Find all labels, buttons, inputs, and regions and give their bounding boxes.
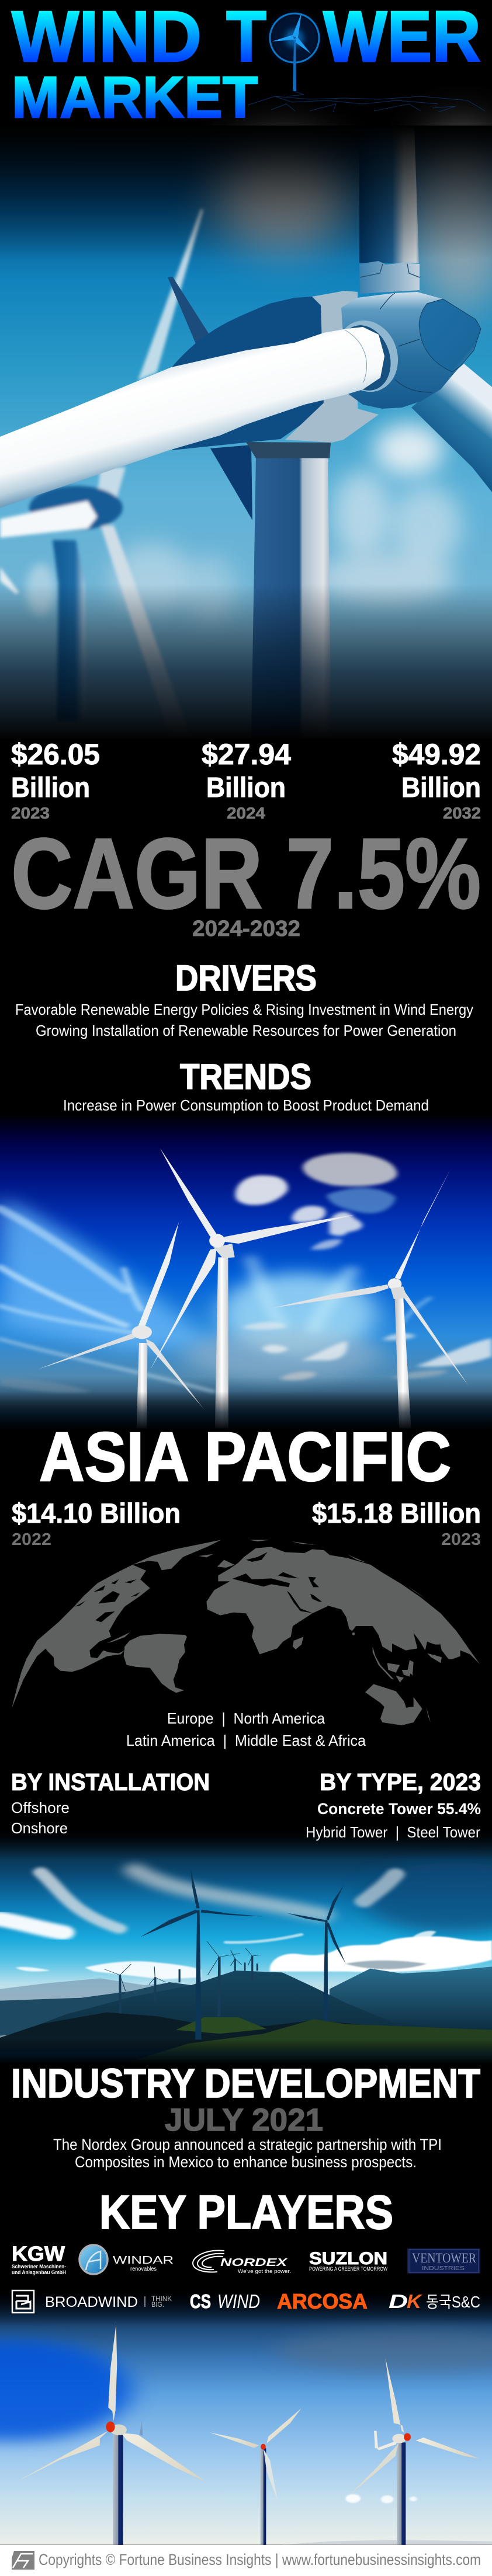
by installation segment: Onshore xyxy=(11,1819,68,1837)
South America xyxy=(124,1634,187,1693)
small tail fin blade xyxy=(168,277,209,345)
logo: Windar xyxy=(79,2245,174,2274)
cumulus clouds xyxy=(16,1931,492,1979)
market size 2032: Billion xyxy=(401,772,481,803)
logo: Nordex xyxy=(193,2251,291,2274)
by type segment: BY TYPE, 2023 xyxy=(320,1769,481,1795)
market size 2023: $26.05 xyxy=(11,738,100,771)
turbine: left xyxy=(39,1222,205,1429)
market size 2023 xyxy=(11,738,100,822)
logo: Suzlon: POWERING A GREENER TOMORROW xyxy=(309,2266,387,2272)
near dark hills xyxy=(0,2013,492,2063)
top fade xyxy=(0,1826,492,1860)
by installation segment: Offshore xyxy=(11,1799,70,1816)
distant hills xyxy=(282,2540,492,2545)
Iceland xyxy=(199,1554,213,1557)
seas cut out of Eurasia xyxy=(233,1552,322,1613)
Greenland xyxy=(133,1540,221,1570)
market size 2023: Billion xyxy=(11,772,90,803)
cloud puffs xyxy=(0,1153,492,1393)
logo: DK Dongkuk S&C: K xyxy=(407,2290,422,2312)
footer band xyxy=(0,2545,492,2576)
by type segment: Hybrid Tower | Steel Tower xyxy=(306,1823,480,1841)
logo: Broadwind: BROADWIND xyxy=(45,2294,138,2310)
other regions: Europe | North America xyxy=(167,1710,325,1727)
logo: KGW: Schweriner Maschinen- xyxy=(12,2264,66,2269)
low-poly network ground under the icon xyxy=(248,90,485,112)
by type segment xyxy=(306,1769,481,1841)
market size 2024 xyxy=(202,738,291,822)
title line: MARKET: MARKET xyxy=(12,65,258,130)
logo: Ventower Industries xyxy=(407,2248,480,2274)
North America xyxy=(12,1565,150,1708)
blade collar ring xyxy=(327,312,407,400)
market size 2032: $49.92 xyxy=(392,738,481,771)
bottom image: three turbines on a pale sky xyxy=(0,2289,492,2545)
Madagascar xyxy=(293,1637,303,1649)
trend text: Increase in Power Consumption to Boost Product Demand xyxy=(63,1096,429,1114)
small background turbines xyxy=(104,1941,261,2016)
dusky upper right xyxy=(276,2330,492,2372)
image: three white turbines on a deep blue sky xyxy=(0,1113,492,1430)
by installation segment: BY INSTALLATION xyxy=(11,1769,210,1795)
lower right blade xyxy=(411,364,492,492)
dark upper right sky xyxy=(361,1863,492,1933)
logo: CS Wind xyxy=(190,2290,260,2312)
far white blade xyxy=(138,208,203,381)
logo: Ventower Industries: INDUSTRIES xyxy=(422,2265,465,2272)
green knoll xyxy=(176,2017,266,2034)
Eurasia and Africa xyxy=(206,1540,480,1725)
bottom fade xyxy=(0,1391,492,1430)
other regions: Latin America | Middle East & Africa xyxy=(126,1732,366,1749)
small clouds xyxy=(345,2494,417,2503)
saturated blue on the left xyxy=(0,2340,132,2441)
broad luminous cirrus on the left xyxy=(0,1197,213,1350)
market size 2024: 2024 xyxy=(227,804,265,822)
icon: Fortune Business Insights mark xyxy=(12,2551,34,2570)
hub seams xyxy=(380,293,432,392)
development text: Composites in Mexico to enhance business prospects. xyxy=(75,2153,417,2171)
logo: Windar: WINDAR xyxy=(113,2254,174,2266)
turbine: right xyxy=(273,1169,468,1429)
bottom fade xyxy=(0,584,492,742)
triangular fin xyxy=(210,445,252,520)
market size 2032 xyxy=(392,738,481,822)
logo: DK Dongkuk S&C xyxy=(389,2290,480,2312)
logo: Broadwind: BIG. xyxy=(151,2300,164,2309)
region value 2023: 2023 xyxy=(441,1530,481,1549)
other regions xyxy=(126,1710,366,1749)
logo: DK Dongkuk S&C: 동국S&C xyxy=(426,2293,480,2311)
right mountain range xyxy=(330,1966,492,2032)
logo: Nordex: We've got the power. xyxy=(238,2268,291,2274)
logo: Windar: renovables xyxy=(130,2266,157,2272)
nacelle xyxy=(171,291,379,450)
spinner hub xyxy=(341,292,481,409)
CAGR period: 2024-2032 xyxy=(192,917,300,941)
main foreground turbine xyxy=(140,1868,263,2039)
logo: Broadwind: THINK xyxy=(151,2295,172,2303)
streak clouds xyxy=(0,1870,396,1943)
market size 2024: Billion xyxy=(206,772,286,803)
turbine: centre xyxy=(150,1148,354,1429)
development date: JULY 2021 xyxy=(165,2102,323,2138)
turbine: right xyxy=(349,2358,480,2545)
hazy far mountains xyxy=(0,1978,195,2001)
region value 2022: $14.10 Billion xyxy=(12,1498,181,1529)
logo: KGW: KGW xyxy=(12,2243,65,2265)
market size 2032: 2032 xyxy=(443,804,481,822)
world map globe xyxy=(12,1540,480,1725)
logo: KGW: und Anlagenbau GmbH xyxy=(12,2269,66,2275)
image: turbines on mountains at sunrise xyxy=(0,1826,492,2064)
wispy clouds xyxy=(0,1209,430,1391)
by type segment: Concrete Tower 55.4% xyxy=(317,1800,481,1818)
top fade xyxy=(0,126,492,260)
by installation segment xyxy=(11,1769,210,1837)
logo: Nordex: NORDEX xyxy=(220,2257,287,2268)
main white blade xyxy=(0,327,384,508)
logo: CS Wind: CS xyxy=(190,2290,211,2312)
development text xyxy=(53,2136,442,2171)
New Zealand sliver xyxy=(426,1707,431,1722)
Sri Lanka xyxy=(352,1632,355,1635)
logo: Ventower Industries: VENTOWER xyxy=(412,2251,477,2265)
Caribbean islands xyxy=(107,1632,130,1643)
icon: turbine in glowing ring xyxy=(269,12,320,91)
yaw flange xyxy=(359,261,420,294)
South-East Asian islands xyxy=(373,1646,442,1683)
driver 2: Growing Installation of Renewable Resources for Power Generation xyxy=(36,1022,456,1039)
central mountain xyxy=(0,1971,492,2063)
title line: WIND T WER xyxy=(12,0,481,77)
market size 2024: $27.94 xyxy=(202,738,291,771)
region value 2022: 2022 xyxy=(12,1530,51,1549)
development text: The Nordex Group announced a strategic partnership with TPI xyxy=(53,2136,442,2153)
distant blurred turbine xyxy=(0,467,190,736)
logo: KGW xyxy=(12,2243,66,2275)
Arctic fragments xyxy=(249,1540,426,1599)
logo: DK Dongkuk S&C: D xyxy=(389,2290,408,2312)
North America inland water xyxy=(75,1579,140,1622)
central glow xyxy=(220,1273,376,1355)
Gulf of Carpentaria cut-out xyxy=(404,1701,414,1708)
tower collar xyxy=(246,442,331,458)
market size 2023: 2023 xyxy=(11,804,50,822)
turbine: left xyxy=(18,2324,206,2545)
tower xyxy=(251,457,331,739)
left ridge xyxy=(0,1982,201,2036)
right foreground turbine xyxy=(287,1885,346,2021)
logo: CS Wind: WIND xyxy=(217,2290,260,2312)
nose cone xyxy=(419,299,481,372)
blade root seam xyxy=(345,330,366,382)
British Isles xyxy=(217,1560,235,1568)
logo: Suzlon: SUZLON xyxy=(309,2249,387,2268)
bottom fade xyxy=(0,2039,492,2064)
Australia and New Guinea xyxy=(365,1684,422,1725)
region value 2022 xyxy=(12,1498,181,1549)
drivers heading: DRIVERS xyxy=(175,958,317,998)
key players heading: KEY PLAYERS xyxy=(99,2186,393,2239)
region heading: ASIA PACIFIC xyxy=(39,1418,451,1496)
image: hero wind turbine close-up xyxy=(0,126,492,742)
mast blade going upwards xyxy=(359,126,419,263)
clouds behind the hero turbine xyxy=(26,128,492,625)
logo: Broadwind xyxy=(12,2290,172,2313)
region value 2023 xyxy=(312,1498,481,1549)
logo: Arcosa: ARCOSA xyxy=(277,2289,368,2313)
green foreground slope xyxy=(126,2019,492,2063)
region value 2023: $15.18 Billion xyxy=(312,1498,481,1529)
title xyxy=(12,0,485,130)
top fade xyxy=(0,2289,492,2326)
turbine: centre xyxy=(210,2408,302,2545)
trends heading: TRENDS xyxy=(180,1057,311,1096)
